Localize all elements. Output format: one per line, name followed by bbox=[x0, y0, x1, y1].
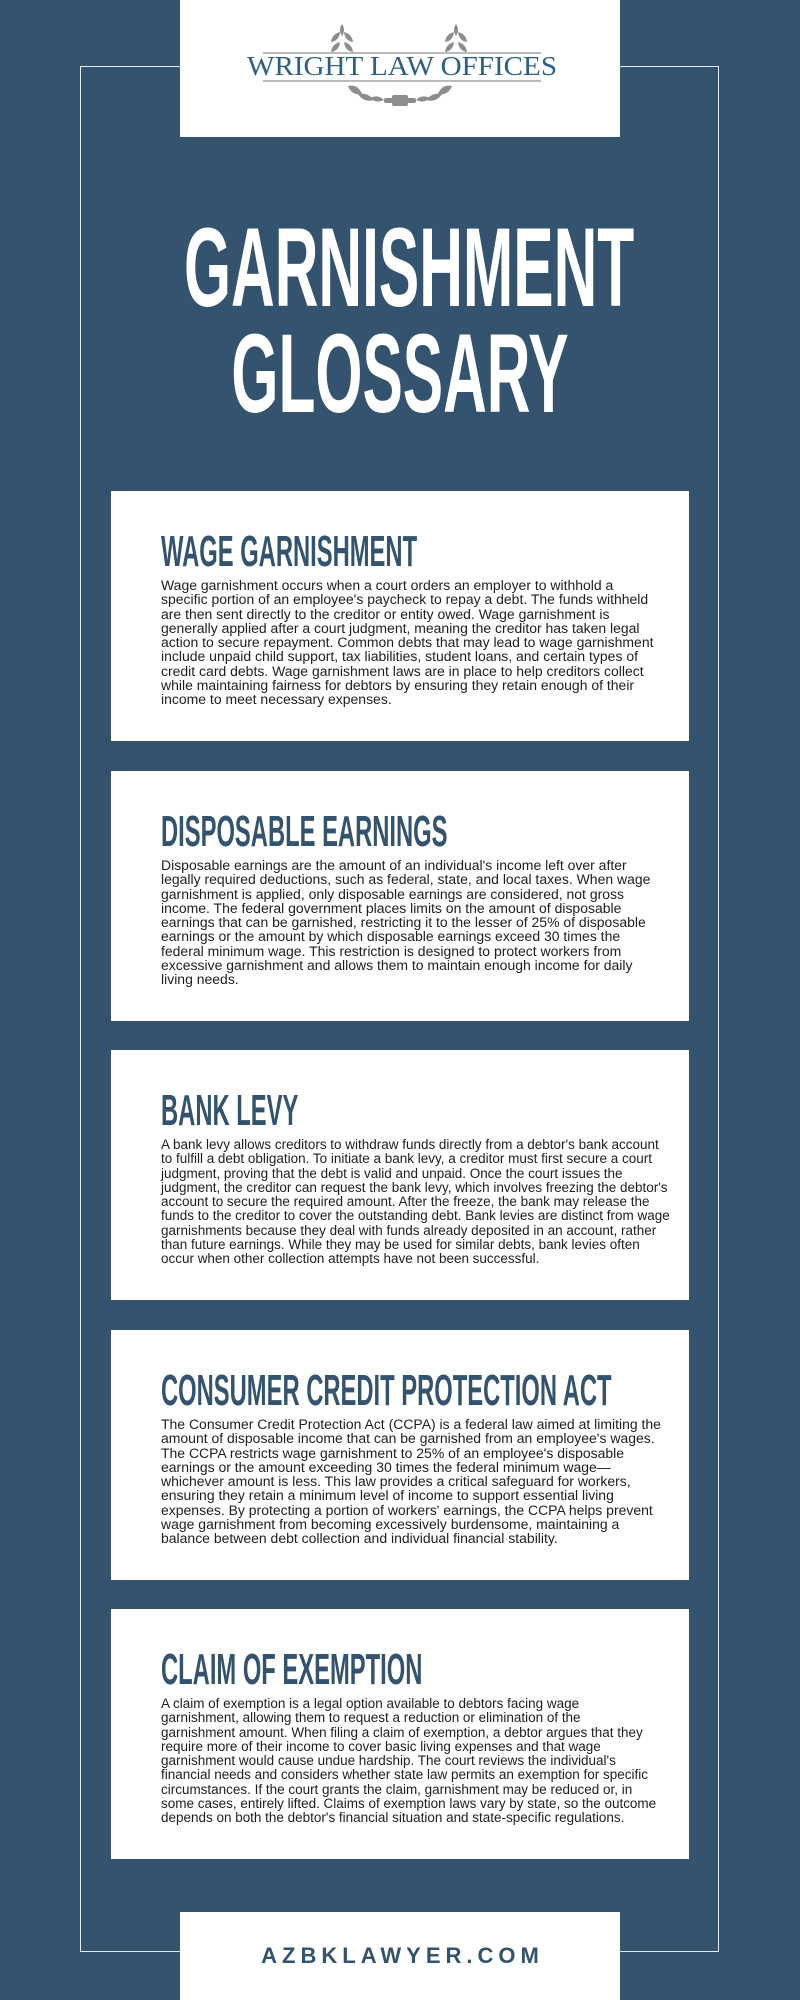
panel: disposable earnings bbox=[111, 771, 689, 1021]
panel: consumer credit protection act: The Consumer Credit Protection Act (CCPA) is a federal law aimed at limiting the bbox=[161, 1417, 661, 1433]
panel: wage garnishment: generally applied after a court judgment, meaning the creditor has taken legal bbox=[161, 621, 640, 637]
panel: disposable earnings: Disposable earnings are the amount of an individual's income left over after bbox=[161, 858, 627, 874]
panel: claim of exemption: financial needs and considers whether state law permits an exemption for specific bbox=[161, 1767, 648, 1783]
text: GLOSSARY bbox=[231, 311, 569, 436]
panel: consumer credit protection act: expenses. By protecting a portion of workers' earnings, the CCPA helps prevent bbox=[161, 1503, 653, 1519]
logo text: WRIGHT LAW OFFICES bbox=[247, 51, 557, 81]
icon: laurel top right bbox=[445, 24, 467, 52]
panel: consumer credit protection act bbox=[111, 1330, 689, 1580]
panel: consumer credit protection act: The CCPA restricts wage garnishment to 25% of an employee's disposable bbox=[161, 1446, 624, 1462]
panel: claim of exemption: require more of their income to cover basic living expenses and that wage bbox=[161, 1739, 601, 1755]
panel: claim of exemption: some cases, entirely lifted. Claims of exemption laws vary by state, so the outcome bbox=[161, 1796, 656, 1812]
panel: disposable earnings: living needs. bbox=[161, 972, 239, 988]
panel: bank levy: judgment, the creditor can request the bank levy, which involves freezing the debtor's bbox=[161, 1180, 668, 1196]
panel: bank levy: A bank levy allows creditors to withdraw funds directly from a debtor's bank account bbox=[161, 1137, 659, 1153]
panel: consumer credit protection act: whichever amount is less. This law provides a critical safeguard for workers, bbox=[161, 1474, 631, 1490]
panel: claim of exemption bbox=[111, 1609, 689, 1859]
panel: wage garnishment: while maintaining fairness for debtors by ensuring they retain enough of their bbox=[161, 678, 634, 694]
panel: bank levy: account to secure the required amount. After the freeze, the bank may release the bbox=[161, 1194, 650, 1210]
panel: claim of exemption: garnishment, allowing them to request a reduction or elimination of the bbox=[161, 1710, 581, 1726]
panel: disposable earnings: earnings or the amount by which disposable earnings exceed 30 times the bbox=[161, 929, 620, 945]
panel: disposable earnings: federal minimum wage. This restriction is designed to protect workers from bbox=[161, 944, 621, 960]
panel: disposable earnings: garnishment is applied, only disposable earnings are considered, not gross bbox=[161, 887, 624, 903]
panel: wage garnishment: action to secure repayment. Common debts that may lead to wage garnishment bbox=[161, 635, 653, 651]
panel: wage garnishment: WAGE GARNISHMENT bbox=[161, 527, 417, 576]
panel: disposable earnings: earnings that can be garnished, restricting it to the lesser of 25% of disposable bbox=[161, 915, 646, 931]
panel: disposable earnings: legally required deductions, such as federal, state, and local taxes. When wage bbox=[161, 872, 650, 888]
panel: claim of exemption: A claim of exemption is a legal option available to debtors facing wage bbox=[161, 1696, 579, 1712]
panel: consumer credit protection act: balance between debt collection and individual financial stability. bbox=[161, 1531, 558, 1547]
icon: laurel bottom bbox=[348, 86, 452, 106]
panel: bank levy: than future earnings. While they may be used for similar debts, bank levies often bbox=[161, 1237, 640, 1253]
panel: claim of exemption: CLAIM OF EXEMPTION bbox=[161, 1645, 422, 1694]
title: GARNISHMENT bbox=[184, 205, 634, 330]
panel: bank levy: occur when other collection attempts have not been successful. bbox=[161, 1251, 539, 1267]
panel: wage garnishment bbox=[111, 491, 689, 741]
panel: consumer credit protection act: amount of disposable income that can be garnished from an employee's wages. bbox=[161, 1431, 655, 1447]
panel: wage garnishment: are then sent directly to the creditor or entity owed. Wage garnishment is bbox=[161, 607, 609, 623]
panel: bank levy bbox=[111, 1050, 689, 1300]
panel: bank levy: funds to the creditor to cover the outstanding debt. Bank levies are distinct from wage bbox=[161, 1208, 670, 1224]
panel: bank levy: judgment, proving that the debt is valid and unpaid. Once the court issues the bbox=[161, 1166, 623, 1182]
panel: bank levy: BANK LEVY bbox=[161, 1086, 298, 1135]
footer bbox=[180, 1912, 620, 2000]
panel: claim of exemption: garnishment would cause undue hardship. The court reviews the individual's bbox=[161, 1753, 616, 1769]
footer: AZBKLAWYER.COM bbox=[261, 1943, 544, 1968]
panel: claim of exemption: depends on both the debtor's financial situation and state-specific regulations. bbox=[161, 1810, 624, 1826]
logo panel bbox=[180, 0, 620, 137]
panel: bank levy: to fulfill a debt obligation. To initiate a bank levy, a creditor must first secure a court bbox=[161, 1151, 652, 1167]
panel: wage garnishment: credit card debts. Wage garnishment laws are in place to help creditors collect bbox=[161, 664, 644, 680]
panel: consumer credit protection act: wage garnishment from becoming excessively burdensome, maintaining a bbox=[161, 1517, 619, 1533]
panel: wage garnishment: Wage garnishment occurs when a court orders an employer to withhold a bbox=[161, 578, 613, 594]
panel: consumer credit protection act: earnings or the amount exceeding 30 times the federal minimum wage— bbox=[161, 1460, 611, 1476]
panel: bank levy: garnishments because they deal with funds already deposited in an account, rather bbox=[161, 1223, 656, 1239]
panel: disposable earnings: excessive garnishment and allows them to maintain enough income for daily bbox=[161, 958, 633, 974]
panel: wage garnishment: income to meet necessary expenses. bbox=[161, 692, 392, 708]
panel: consumer credit protection act: CONSUMER CREDIT PROTECTION ACT bbox=[161, 1366, 612, 1415]
panel: claim of exemption: garnishment amount. When filing a claim of exemption, a debtor argues that they bbox=[161, 1725, 643, 1741]
panel: claim of exemption: circumstances. If the court grants the claim, garnishment may be reduced or, in bbox=[161, 1782, 632, 1798]
panel: wage garnishment: specific portion of an employee's paycheck to repay a debt. The funds withheld bbox=[161, 592, 648, 608]
panel: wage garnishment: include unpaid child support, tax liabilities, student loans, and certain types of bbox=[161, 649, 638, 665]
panel: disposable earnings: income. The federal government places limits on the amount of disposable bbox=[161, 901, 621, 917]
icon: laurel top left bbox=[331, 24, 353, 52]
panel: consumer credit protection act: ensuring they retain a minimum level of income to support essential living bbox=[161, 1488, 614, 1504]
panel: disposable earnings: DISPOSABLE EARNINGS bbox=[161, 807, 447, 856]
